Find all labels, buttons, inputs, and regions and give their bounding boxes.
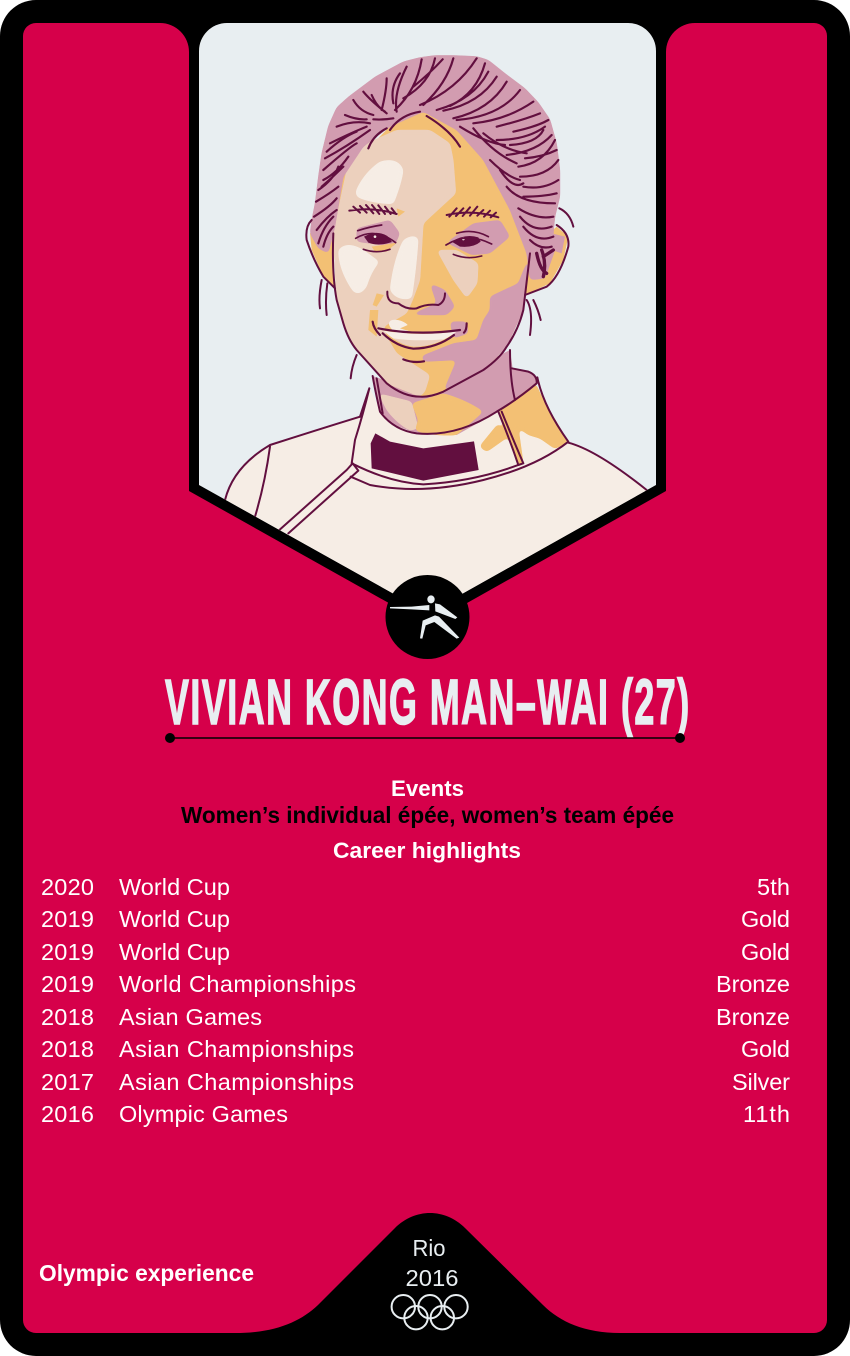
- career highlights table: [41, 874, 790, 1127]
- row 2019 World Cup second: [41, 939, 790, 965]
- face base: [333, 112, 530, 397]
- Rio label: Rio: [412, 1235, 446, 1261]
- career highlights heading: Career highlights: [333, 838, 521, 863]
- events list: Women’s individual épée, women’s team épée: [181, 802, 674, 828]
- mouth and chin: [373, 322, 467, 362]
- portrait panel: [190, 23, 656, 633]
- name heading: VIVIAN KONG MAN–WAI (27): [165, 666, 689, 738]
- row 2017 Asian Championships: 2017: [41, 1069, 94, 1095]
- face shadow tone: [422, 264, 528, 389]
- row 2018 Asian Championships: [41, 1036, 790, 1062]
- row 2016 Olympic Games: 2016: [41, 1101, 94, 1127]
- row 2019 World Championships: 2019: [41, 971, 94, 997]
- row 2016 Olympic Games: 11th: [743, 1101, 790, 1127]
- row 2019 World Championships: World Championships: [119, 971, 356, 997]
- row 2019 World Cup: 2019: [41, 906, 94, 932]
- row 2016 Olympic Games: Olympic Games: [119, 1101, 288, 1127]
- row 2018 Asian Championships: Asian Championships: [119, 1036, 354, 1062]
- row 2019 World Cup second: Gold: [741, 939, 790, 965]
- fencing jacket and neck: [224, 299, 648, 594]
- row 2018 Asian Championships: 2018: [41, 1036, 94, 1062]
- row 2019 World Cup: Gold: [741, 906, 790, 932]
- row 2019 World Championships: [41, 971, 790, 997]
- row 2018 Asian Games: [41, 1004, 790, 1030]
- row 2018 Asian Championships: Gold: [741, 1036, 790, 1062]
- events heading: Events: [391, 776, 464, 801]
- fencer figure: [390, 595, 459, 639]
- row 2020 World Cup: [41, 874, 790, 900]
- portrait illustration: [190, 55, 650, 633]
- hair strands: [314, 58, 558, 277]
- row 2019 World Cup second: 2019: [41, 939, 94, 965]
- Olympic experience label: Olympic experience: [39, 1260, 254, 1286]
- row 2017 Asian Championships: Silver: [732, 1069, 790, 1095]
- icon: Olympic rings: [392, 1295, 468, 1329]
- row 2017 Asian Championships: Asian Championships: [119, 1069, 354, 1095]
- row 2020 World Cup: 2020: [41, 874, 94, 900]
- hair: [310, 55, 560, 280]
- row 2019 World Championships: Bronze: [716, 971, 790, 997]
- eyebrows: [349, 205, 498, 217]
- row 2017 Asian Championships: [41, 1069, 790, 1095]
- row 2018 Asian Games: Asian Games: [119, 1004, 262, 1030]
- face highlights: [338, 160, 418, 336]
- row 2020 World Cup: 5th: [757, 874, 790, 900]
- row 2019 World Cup: [41, 906, 790, 932]
- icon: fencer badge: [386, 575, 470, 659]
- name underline: [165, 733, 685, 743]
- face outline: [306, 208, 573, 397]
- row 2018 Asian Games: 2018: [41, 1004, 94, 1030]
- ears: [310, 227, 568, 295]
- row 2019 World Cup second: World Cup: [119, 939, 230, 965]
- 2016 label: 2016: [406, 1265, 458, 1291]
- row 2019 World Cup: World Cup: [119, 906, 230, 932]
- row 2018 Asian Games: Bronze: [716, 1004, 790, 1030]
- face light tone: [333, 130, 456, 397]
- row 2016 Olympic Games: [41, 1101, 790, 1127]
- eyes: [364, 233, 481, 247]
- row 2020 World Cup: World Cup: [119, 874, 230, 900]
